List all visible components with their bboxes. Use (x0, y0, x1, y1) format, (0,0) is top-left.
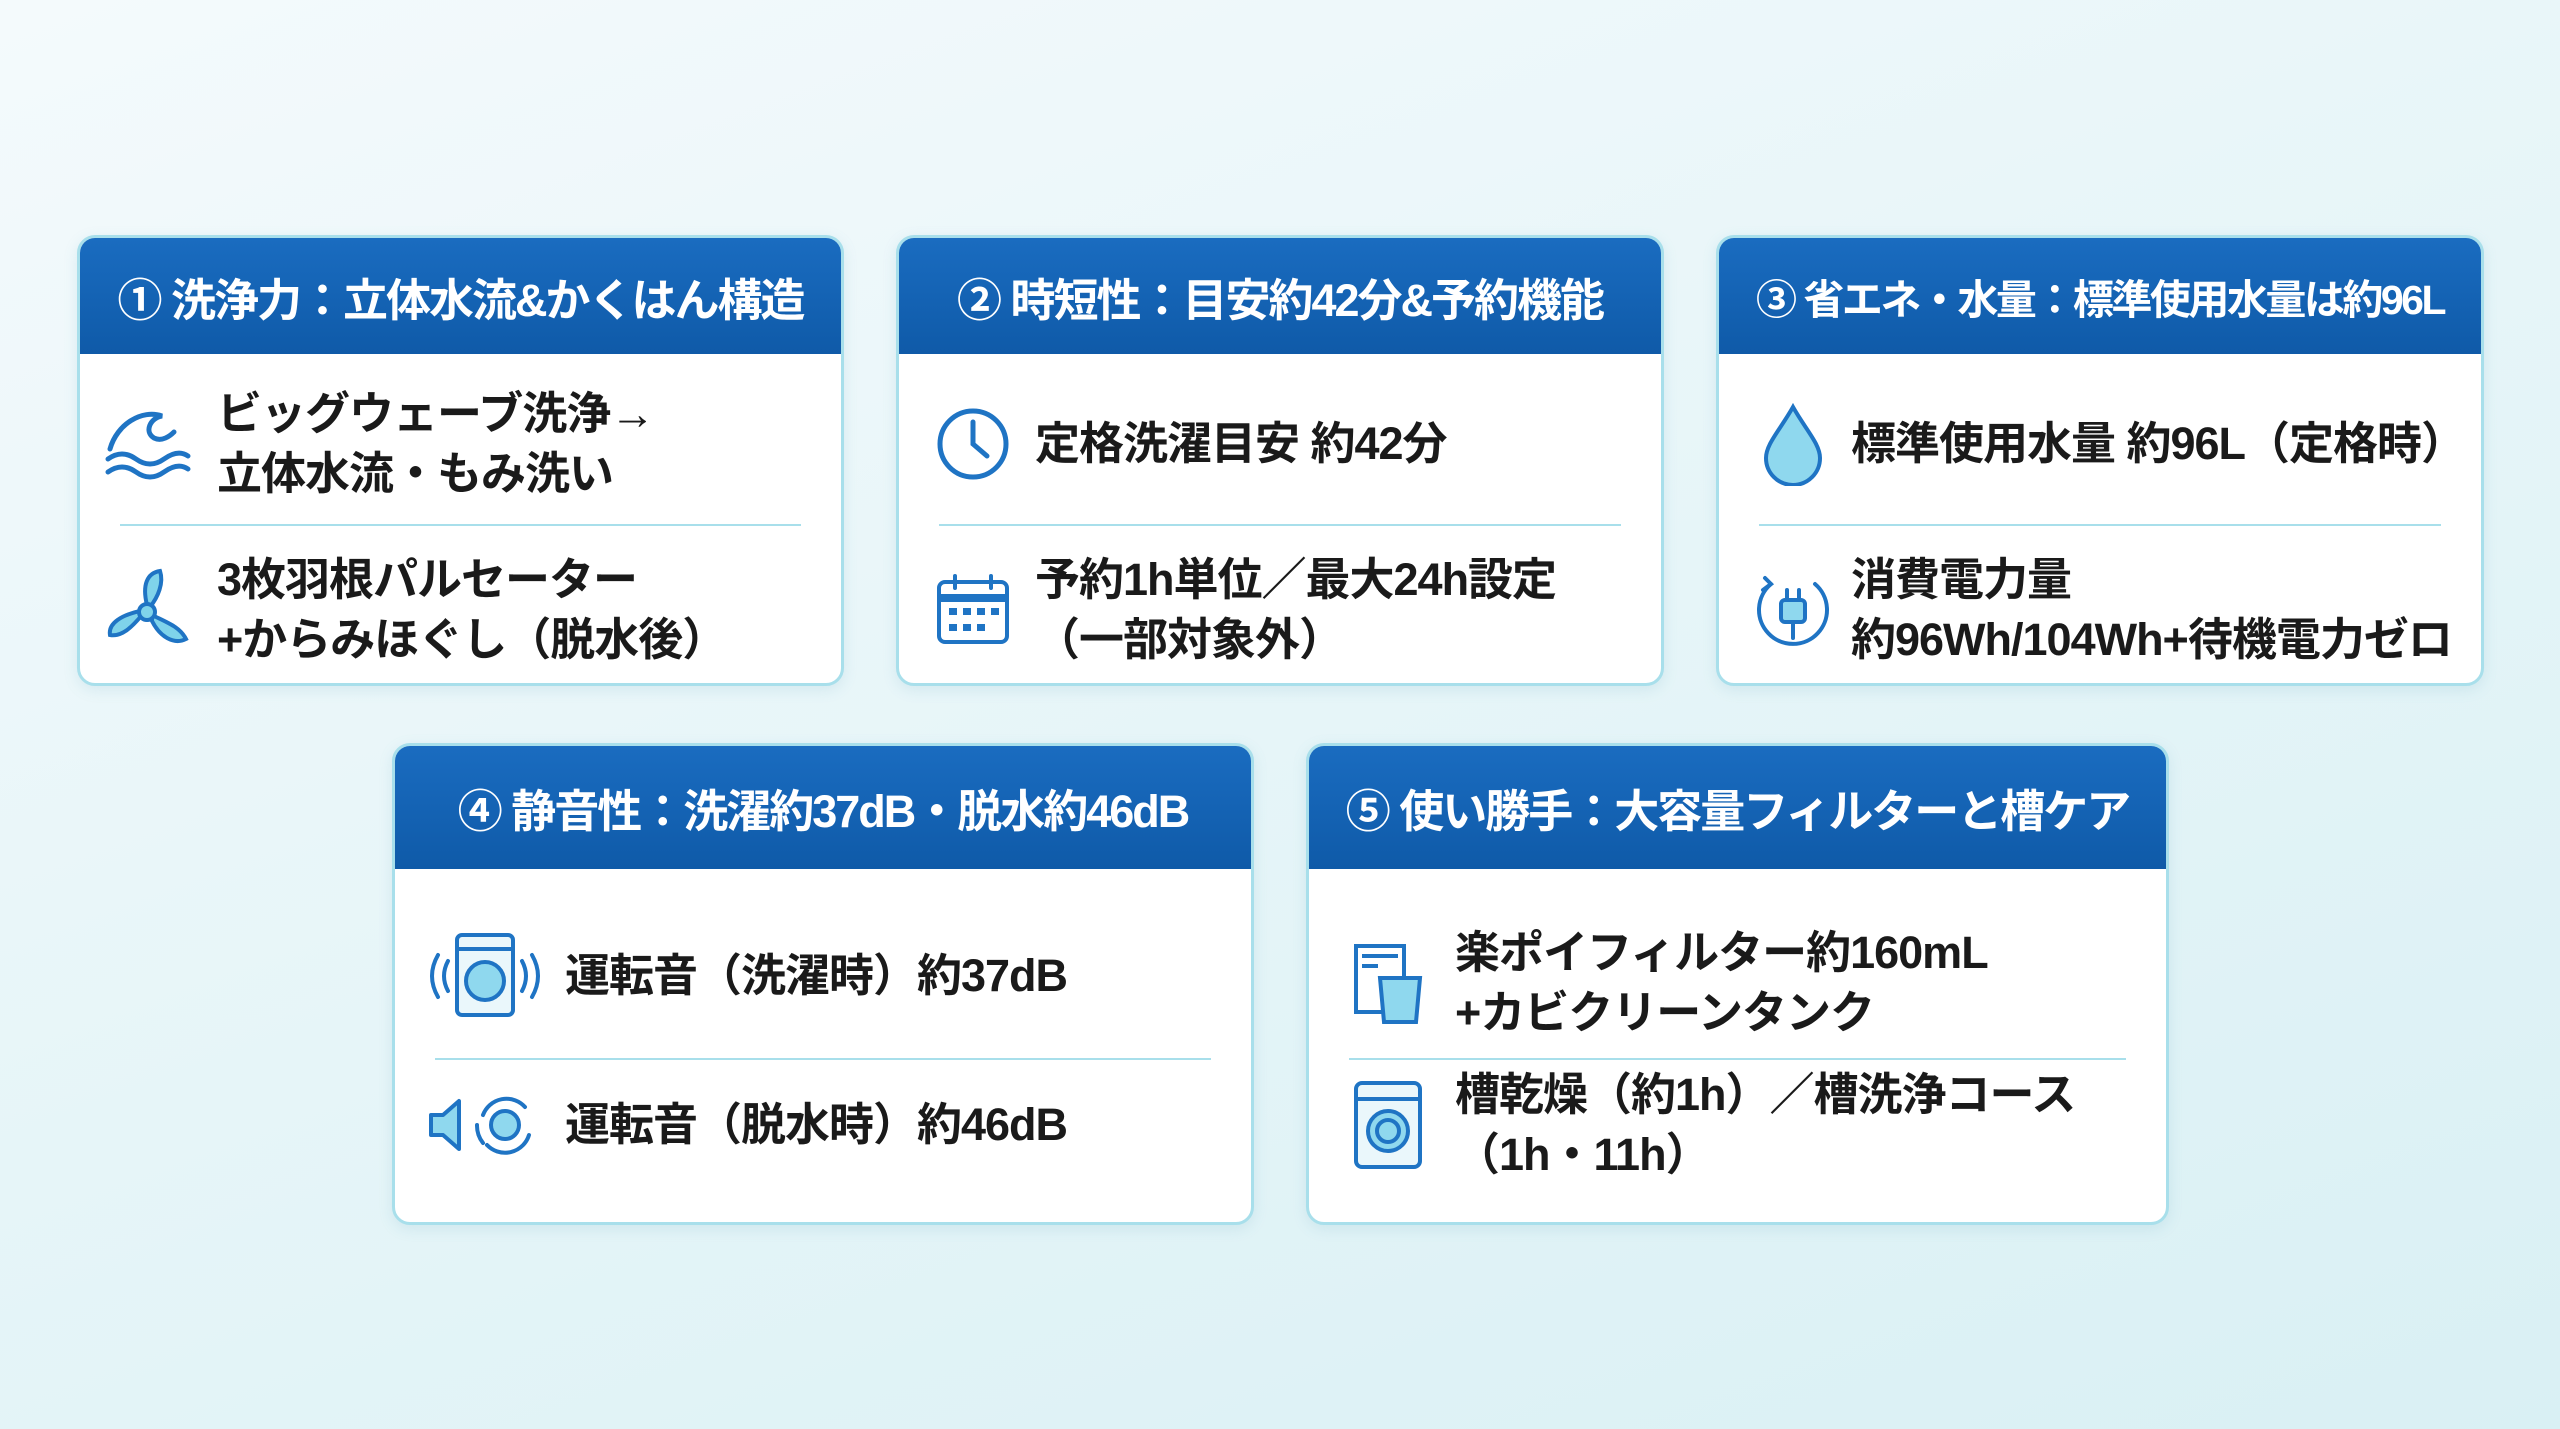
heading 4: ④ 静音性：洗濯約37dB・脱水約46dB (458, 786, 1188, 837)
icon: speaker spin (429, 1096, 532, 1155)
heading 3: ③ 省エネ・水量：標準使用水量は約96L (1756, 277, 2444, 323)
icon: wave (106, 412, 190, 480)
text: tub care: （1h・11h） (1455, 1129, 1710, 1180)
text: filter: 楽ポイフィルター約160mL (1455, 927, 1988, 978)
panel: 5 usability (1306, 743, 2169, 1225)
icon: power plug (1757, 576, 1829, 646)
panel: 4 quietness (392, 743, 1254, 1225)
text: water usage: 標準使用水量 約96L（定格時） (1851, 418, 2465, 469)
heading 1: ① 洗浄力：立体水流&かくはん構造 (117, 274, 804, 326)
text: big wave (217, 388, 654, 499)
text: power consumption (1851, 554, 2452, 665)
text: big wave: 立体水流・もみ洗い (217, 448, 613, 499)
text: reservation: （一部対象外） (1035, 614, 1343, 665)
icon: washer with sound (430, 933, 540, 1017)
text: filter: +カビクリーンタンク (1455, 987, 1874, 1038)
text: big wave: ビッグウェーブ洗浄→ (217, 388, 654, 439)
text: tub care: 槽乾燥（約1h）／槽洗浄コース (1455, 1069, 2075, 1120)
text: power consumption: 消費電力量 (1851, 554, 2071, 605)
text: spin noise: 運転音（脱水時）約46dB (565, 1099, 1067, 1150)
icon: washer (1354, 1081, 1422, 1169)
heading 5: ⑤ 使い勝手：大容量フィルターと槽ケア (1346, 786, 2129, 837)
icon: calendar (937, 574, 1009, 644)
text: standard wash time: 定格洗濯目安 約42分 (1035, 418, 1447, 469)
text: reservation: 予約1h単位／最大24h設定 (1035, 554, 1556, 605)
text: pulsator (217, 554, 726, 665)
text: tub care (1455, 1069, 2075, 1180)
heading 3 (1719, 238, 2481, 354)
icon: water drop (1764, 403, 1822, 486)
text: reservation (1035, 554, 1556, 665)
icon: clock (938, 408, 1008, 480)
text: power consumption: 約96Wh/104Wh+待機電力ゼロ (1851, 614, 2452, 665)
text: wash noise: 運転音（洗濯時）約37dB (565, 950, 1067, 1001)
panel: 1 cleaning power (77, 235, 844, 686)
icon: filter cup (1354, 944, 1422, 1024)
panel: 3 energy and water (1716, 235, 2484, 686)
heading 4 (395, 746, 1251, 869)
text: filter (1455, 927, 1988, 1038)
panel: 2 time saving (896, 235, 1664, 686)
text: pulsator: 3枚羽根パルセーター (217, 554, 637, 605)
heading 2: ② 時短性：目安約42分&予約機能 (957, 274, 1603, 326)
text: pulsator: +からみほぐし（脱水後） (217, 614, 726, 665)
heading 5 (1309, 746, 2166, 869)
icon: propeller (108, 568, 189, 644)
heading 1 (80, 238, 841, 354)
heading 2 (899, 238, 1661, 354)
